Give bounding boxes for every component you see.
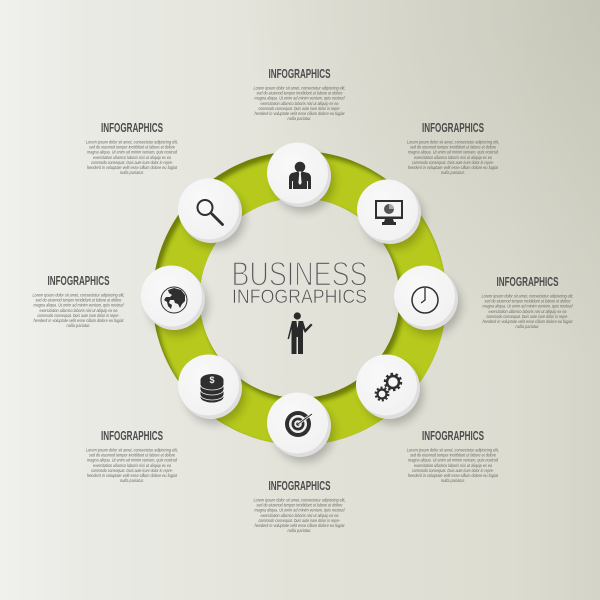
text: bottom right block: henderit in voluptate velit esse cillum dolore eu fugiat [408,473,499,478]
disc: globe [141,266,208,335]
text: top left block: nulla pariatur. [120,170,144,175]
text: top block: magna aliqua. Ut enim ad minim veniam, quis nostrud [254,96,345,101]
text: bottom left block: INFOGRAPHICS [101,429,163,443]
icon: target [285,411,312,437]
text: bottom left block: nulla pariatur. [120,478,144,483]
text: left block: magna aliqua. Ut enim ad minim veniam, quis nostrud [34,303,124,308]
text: bottom right block: Lorem ipsum dolor sit amet, consectetur adipiscing elit, [407,448,499,452]
text: left block: henderit in voluptate velit esse cillum dolore eu fugiat [34,318,124,323]
text: top right block: Lorem ipsum dolor sit amet, consectetur adipiscing elit, [407,140,499,144]
text: left block: Lorem ipsum dolor sit amet, consectetur adipiscing elit, [32,292,124,298]
text: right block: nulla pariatur. [516,324,540,329]
text: top left block: sed do eiusmod tempor incididunt ut labore et dolore [89,145,175,150]
icon: gears [376,374,401,400]
disc: clock [394,266,461,335]
text: right block: henderit in voluptate velit esse cillum dolore eu fugiat [482,319,573,324]
disc: coins [178,354,245,424]
text: bottom right block: nulla pariatur. [441,478,465,483]
text: left block [32,274,124,328]
text: bottom block: magna aliqua. Ut enim ad minim veniam, quis nostrud [254,508,345,513]
text: left block: sed do eiusmod tempor incididunt ut labore et dolore [36,298,122,303]
text: left block: commodo consequat. Duis aute irure dolor in repre- [38,313,120,318]
text: bottom block: exercitation ullamco laboris nisi ut aliquip ex ea [260,513,339,518]
disc: top, person [267,142,334,212]
text: right block: exercitation ullamco laboris nisi ut aliquip ex ea [488,309,567,314]
text: bottom left block: Lorem ipsum dolor sit amet, consectetur adipiscing elit, [86,448,178,452]
disc: gears [356,354,423,424]
text: top block [254,67,346,121]
text: left block: INFOGRAPHICS [48,274,110,288]
text: top left block [86,121,178,175]
text: top right block: INFOGRAPHICS [422,121,484,135]
icon: person [289,162,311,189]
text: right block: magna aliqua. Ut enim ad minim veniam, quis nostrud [482,304,573,309]
text: top right block [407,121,499,175]
text: bottom block: henderit in voluptate velit esse cillum dolore eu fugiat [254,523,345,528]
center title: BUSINESS [232,256,368,294]
text: bottom right block: INFOGRAPHICS [422,429,484,443]
text: top right block: sed do eiusmod tempor incididunt ut labore et dolore [410,145,496,150]
text: top right block: commodo consequat. Duis aute irure dolor in repre- [412,160,494,165]
text: left block: nulla pariatur. [66,323,90,328]
text: bottom block: sed do eiusmod tempor incididunt ut labore et dolore [256,503,343,508]
text: top left block: commodo consequat. Duis aute irure dolor in repre- [91,160,173,165]
disc: search [178,178,245,248]
text: bottom block: INFOGRAPHICS [268,479,330,493]
text: top block: commodo consequat. Duis aute irure dolor in repre- [258,106,341,111]
text: bottom right block: commodo consequat. Duis aute irure dolor in repre- [412,468,494,473]
text: top block: nulla pariatur. [288,116,312,121]
icon: magnifier [198,200,222,224]
text: bottom right block: magna aliqua. Ut enim ad minim veniam, quis nostrud [408,458,498,463]
text: top left block: INFOGRAPHICS [101,121,163,135]
text: top left block: Lorem ipsum dolor sit amet, consectetur adipiscing elit, [86,140,178,144]
text: right block [482,275,574,329]
text: top left block: henderit in voluptate velit esse cillum dolore eu fugiat [87,165,178,170]
text: top right block: magna aliqua. Ut enim ad minim veniam, quis nostrud [408,150,498,155]
text: top block: henderit in voluptate velit esse cillum dolore eu fugiat [254,111,345,116]
text: bottom left block: commodo consequat. Duis aute irure dolor in repre- [91,468,173,473]
icon: globe [161,287,187,313]
disc: target [267,392,334,462]
center title: INFOGRAPHICS [232,287,367,308]
disc: monitor [357,180,424,249]
text: bottom left block: magna aliqua. Ut enim ad minim veniam, quis nostrud [87,458,177,463]
text: right block: Lorem ipsum dolor sit amet, consectetur adipiscing elit, [482,294,574,298]
text: top block: sed do eiusmod tempor incididunt ut labore et dolore [256,91,343,96]
icon: presenter man [288,312,312,354]
text: bottom right block [407,429,499,483]
text: left block: exercitation ullamco laboris nisi ut aliquip ex ea [40,308,118,313]
text: top block: Lorem ipsum dolor sit amet, consectetur adipiscing elit, [254,86,346,90]
icon: coins with dollar: $ [209,375,215,385]
icon: clock [412,287,438,313]
icon: monitor with pie chart [375,200,403,225]
text: top left block: magna aliqua. Ut enim ad minim veniam, quis nostrud [87,150,177,155]
text: bottom left block: henderit in voluptate velit esse cillum dolore eu fugiat [87,473,178,478]
text: top right block: henderit in voluptate velit esse cillum dolore eu fugiat [408,165,499,170]
text: bottom right block: sed do eiusmod tempor incididunt ut labore et dolore [410,453,496,458]
text: bottom left block [86,429,178,483]
text: right block: sed do eiusmod tempor incididunt ut labore et dolore [484,299,571,304]
text: bottom right block: exercitation ullamco laboris nisi ut aliquip ex ea [414,463,492,468]
text: bottom block [254,479,346,533]
text: bottom left block: sed do eiusmod tempor incididunt ut labore et dolore [89,453,175,458]
text: top block: exercitation ullamco laboris nisi ut aliquip ex ea [260,101,339,106]
text: top right block: exercitation ullamco laboris nisi ut aliquip ex ea [414,155,492,160]
green ring [154,152,444,443]
text: top left block: exercitation ullamco laboris nisi ut aliquip ex ea [93,155,171,160]
center title [232,256,368,308]
text: right block: commodo consequat. Duis aute irure dolor in repre- [486,314,569,319]
text: bottom block: commodo consequat. Duis aute irure dolor in repre- [258,518,341,523]
text: top block: INFOGRAPHICS [268,67,330,81]
text: bottom left block: exercitation ullamco laboris nisi ut aliquip ex ea [93,463,171,468]
text: bottom block: Lorem ipsum dolor sit amet, consectetur adipiscing elit, [254,498,346,502]
text: top right block: nulla pariatur. [441,170,465,175]
text: bottom block: nulla pariatur. [288,528,312,533]
text: right block: INFOGRAPHICS [496,275,558,289]
